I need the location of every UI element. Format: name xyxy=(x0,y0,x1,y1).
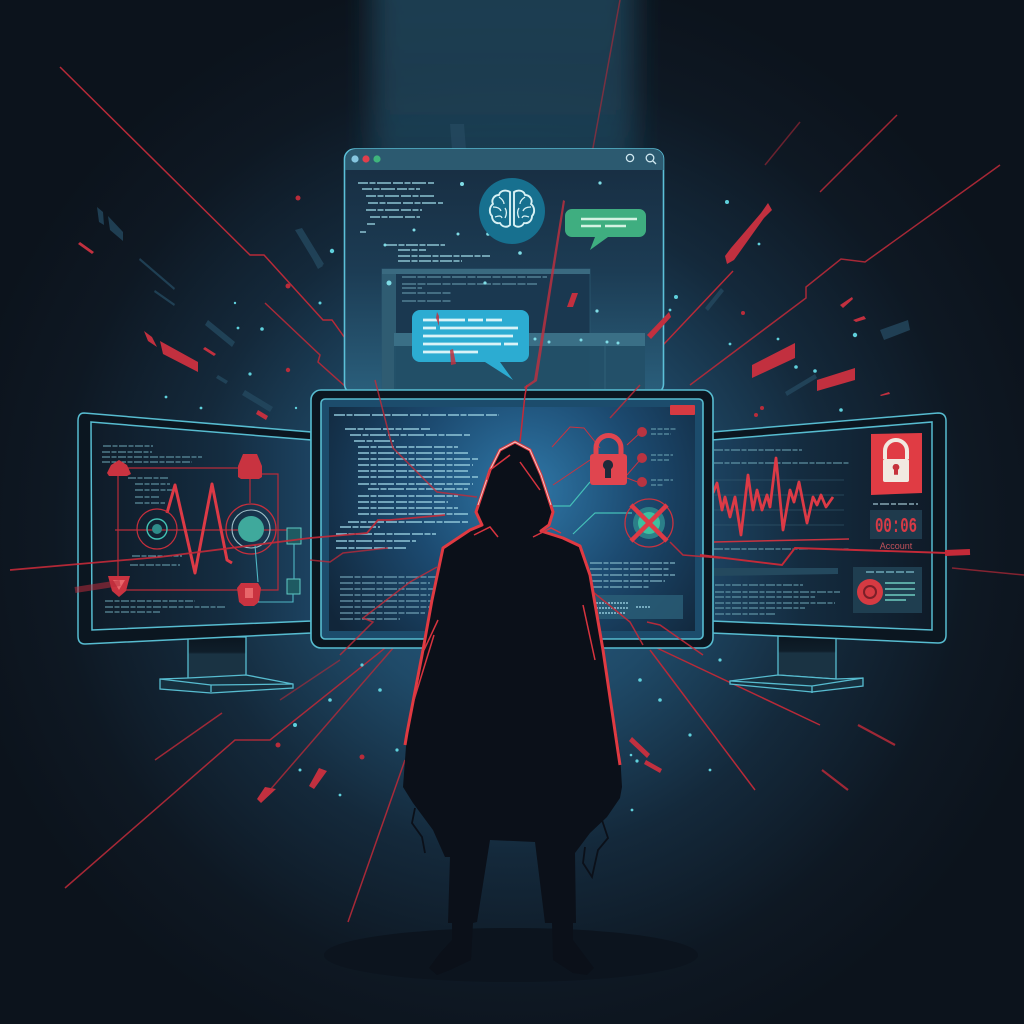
cloak, legs and boots silhouette xyxy=(403,442,622,975)
small lock icons xyxy=(637,427,647,487)
center right code block xyxy=(590,563,675,587)
red connector lines xyxy=(552,427,640,485)
chart baseline xyxy=(714,539,849,542)
teal connectors xyxy=(255,544,294,602)
red markers low xyxy=(276,742,364,760)
red node icons xyxy=(107,454,262,606)
alert badge xyxy=(670,405,695,415)
right target xyxy=(226,504,276,554)
window frame xyxy=(344,149,664,394)
left target xyxy=(137,509,177,549)
center monitor screen xyxy=(321,399,703,639)
right monitor stand xyxy=(730,636,863,693)
center monitor xyxy=(311,390,713,648)
background debris: blue shards xyxy=(97,124,910,412)
center lower code block xyxy=(340,577,440,619)
right monitor screen xyxy=(712,422,932,630)
title bar xyxy=(346,149,664,170)
chart grid xyxy=(714,480,844,525)
scattered particles xyxy=(165,200,857,811)
window overlay red lines and shards xyxy=(436,200,671,389)
right heartbeat line xyxy=(713,458,833,535)
left monitor screen xyxy=(91,422,311,630)
teal node boxes xyxy=(287,528,301,594)
center screen inner panel xyxy=(329,407,695,631)
cloak ties xyxy=(412,808,608,877)
teal connector lines xyxy=(553,482,632,534)
timer xyxy=(870,510,922,539)
left screen code lines xyxy=(102,446,225,612)
left monitor xyxy=(75,413,311,693)
left diagram connectors xyxy=(115,468,290,590)
right monitor frame xyxy=(712,413,946,643)
icon: brain xyxy=(479,178,545,244)
hood light edge xyxy=(478,442,551,505)
green chat bubble xyxy=(565,209,646,250)
code lines upper xyxy=(358,183,443,232)
ground shadow xyxy=(324,928,698,982)
center code block xyxy=(334,415,499,548)
red dots xyxy=(286,196,764,417)
timer: 00:06 xyxy=(875,516,917,539)
left monitor stand xyxy=(160,637,293,693)
progress panel xyxy=(590,595,683,619)
background debris: red shards xyxy=(78,203,890,803)
lock captions xyxy=(651,429,677,485)
left heartbeat line xyxy=(167,484,232,573)
hooded figure xyxy=(403,442,622,975)
faded red streak xyxy=(75,583,120,590)
right monitor xyxy=(712,413,946,693)
fold highlights xyxy=(414,455,595,700)
top browser window xyxy=(344,149,671,394)
foreground red circuit lines xyxy=(10,380,970,655)
window control dots xyxy=(351,155,381,163)
right screen code lines xyxy=(714,450,849,614)
blue chat bubble xyxy=(412,310,529,380)
red lock tile xyxy=(871,433,922,495)
title bar icons xyxy=(626,154,656,164)
lower overlay panel xyxy=(394,333,645,389)
top light beam xyxy=(372,0,634,220)
status caption xyxy=(873,503,918,505)
inner code panel xyxy=(382,269,590,389)
left monitor frame xyxy=(78,413,311,644)
icon: red padlock xyxy=(590,436,627,485)
crossed target icon xyxy=(625,499,673,547)
red rim of cloak xyxy=(405,442,620,765)
alert panel xyxy=(853,567,922,613)
code lines middle xyxy=(385,245,490,261)
center monitor frame xyxy=(311,390,713,648)
red node glyphs xyxy=(113,580,253,598)
window particles xyxy=(384,181,620,344)
timer caption: Account xyxy=(880,541,913,551)
report header bar xyxy=(714,568,838,576)
